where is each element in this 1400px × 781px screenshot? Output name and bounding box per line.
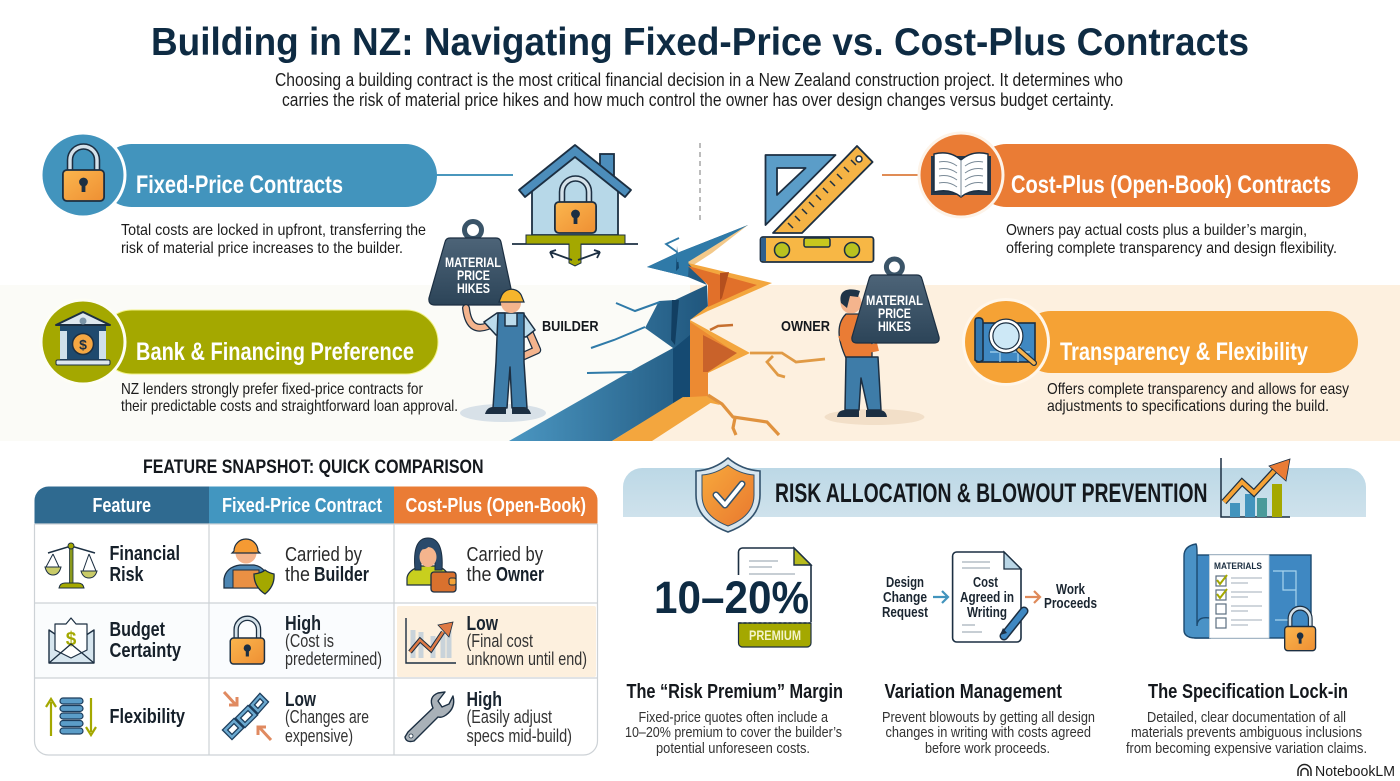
small blue fissures (666, 238, 679, 262)
icon: chain under pressure (224, 692, 271, 740)
column: variation management: before work proceeds. (925, 741, 1050, 757)
icon: shield with tick (696, 458, 760, 532)
icon: padlock (63, 146, 104, 201)
centre divider (699, 143, 701, 222)
row: budget certainty: Budget (110, 619, 165, 641)
subtitle (275, 70, 1123, 110)
flow: design change to work proceeds: Design (886, 575, 924, 591)
icon: open book (931, 153, 991, 197)
icon: padlock (230, 618, 264, 664)
label: builder: BUILDER (542, 318, 599, 335)
column: variation management: changes in writing with costs agreed (886, 725, 1091, 741)
panel: bank and financing preference: their predictable costs and straightforward loan approval. (121, 398, 458, 415)
heading: feature snapshot: FEATURE SNAPSHOT: QUICK COMPARISON (143, 456, 484, 478)
icon: envelope with dollar: $ (66, 629, 77, 650)
row: flexibility (46, 689, 572, 746)
icon: spring with arrows (46, 698, 96, 736)
column: specification lock-in: The Specification Lock-in (1148, 680, 1348, 703)
flow: design change to work proceeds: Work (1056, 582, 1086, 598)
panel: fixed-price contracts (40, 132, 513, 257)
subtitle: carries the risk of material price hikes and how much control the owner has over design changes versus budget certainty. (282, 90, 1114, 110)
column: variation management: Prevent blowouts by getting all design (882, 710, 1095, 726)
panel: cost-plus contracts: Cost-Plus (Open-Book) Contracts (1011, 171, 1331, 199)
panel: transparency and flexibility: Offers complete transparency and allows for easy (1047, 381, 1349, 398)
flow: design change to work proceeds: Proceeds (1044, 596, 1097, 612)
flow: design change to work proceeds: Change (883, 590, 927, 606)
small orange fissures (710, 325, 733, 330)
panel: cost-plus contracts: Owners pay actual costs plus a builder’s margin, (1006, 222, 1307, 239)
row: budget certainty: predetermined) (285, 649, 382, 669)
row: financial risk: Builder (314, 564, 369, 586)
panel: bank and financing preference: NZ lenders strongly prefer fixed-price contracts for (121, 381, 424, 398)
weight: material price hikes, builder (429, 222, 513, 305)
logo: NotebookLM: NotebookLM (1315, 763, 1395, 780)
column: risk premium margin: 10–20% premium to cover the builder’s (625, 725, 842, 741)
panel: bank and financing preference (40, 298, 458, 415)
row: flexibility: Low (285, 689, 316, 711)
orange lip along bottom (612, 397, 712, 441)
background band: builder side (0, 285, 700, 441)
row: budget certainty: (Final cost (466, 631, 533, 651)
row: flexibility: (Changes are (285, 707, 369, 727)
table header (92, 495, 586, 517)
panel: transparency and flexibility (962, 298, 1358, 415)
row: financial risk: Financial (110, 543, 180, 565)
weight: material price hikes, owner: HIKES (878, 318, 911, 334)
row: budget certainty: High (285, 613, 321, 635)
row: flexibility: specs mid-build) (466, 726, 572, 746)
flow: design change to work proceeds: Writing (967, 605, 1007, 621)
panel: transparency and flexibility: adjustments to specifications during the build. (1047, 398, 1329, 415)
row: budget certainty: unknown until end) (466, 649, 587, 669)
title: Building in NZ: Navigating Fixed-Price vs. Cost-Plus Contracts (151, 21, 1249, 64)
row: flexibility: High (466, 689, 502, 711)
background band: owner side (690, 285, 1400, 441)
flow: design change to work proceeds (882, 552, 1097, 642)
figure: owner (824, 289, 924, 425)
row: flexibility: Flexibility (110, 706, 186, 728)
row: financial risk: the (466, 564, 492, 586)
row: budget certainty (49, 613, 587, 669)
icon: house with padlock (512, 145, 638, 266)
weight: material price hikes, owner: MATERIAL (866, 292, 923, 308)
big number: 10–20% (654, 572, 809, 623)
row: budget certainty: (Cost is (285, 631, 334, 651)
icon: materials blueprint: MATERIALS (1214, 561, 1262, 572)
icon: premium document: PREMIUM (749, 627, 801, 643)
row: financial risk: Carried by (466, 544, 543, 566)
row: flexibility: (Easily adjust (466, 707, 552, 727)
blue wall (509, 225, 748, 441)
panel: cost-plus contracts: offering complete transparency and design flexibility. (1006, 240, 1337, 257)
panel: fixed-price contracts: Fixed-Price Contracts (136, 171, 343, 199)
flow: design change to work proceeds: Request (882, 605, 928, 621)
column: risk premium margin: Fixed-price quotes often include a (638, 710, 829, 726)
weight: material price hikes, builder: HIKES (457, 280, 490, 296)
weight: material price hikes, owner (852, 259, 939, 343)
icon: envelope with dollar (49, 618, 94, 663)
column: specification lock-in (1126, 544, 1367, 757)
column: variation management: Variation Management (884, 680, 1062, 703)
column: risk premium margin: potential unforeseen costs. (656, 741, 810, 757)
icon: materials blueprint (1184, 544, 1316, 651)
row: financial risk: the (285, 564, 310, 586)
icon: rising cost chart (406, 618, 456, 663)
icon: set square, ruler and spirit level (760, 146, 874, 262)
icon: premium document (738, 548, 811, 647)
weight: material price hikes, builder: PRICE (457, 267, 490, 283)
column: risk premium margin: The “Risk Premium” Margin (626, 680, 843, 703)
upper orange wall (688, 263, 772, 320)
icon: bank (56, 312, 110, 365)
icon: wrench (405, 692, 454, 742)
row: budget certainty: Certainty (110, 640, 182, 662)
column: specification lock-in: Detailed, clear documentation of all (1147, 710, 1346, 726)
column: specification lock-in: materials prevents ambiguous inclusions (1131, 725, 1362, 741)
table header: Fixed-Price Contract (222, 495, 382, 517)
lower orange wall (683, 320, 750, 405)
table header: Feature (92, 495, 151, 517)
icon: rising growth chart (1221, 458, 1290, 517)
row: financial risk (45, 538, 544, 594)
column: variation management (882, 552, 1097, 757)
row: financial risk: Carried by (285, 544, 362, 566)
icon: scales (45, 543, 97, 588)
banner: risk allocation and blowout prevention: RISK ALLOCATION & BLOWOUT PREVENTION (775, 478, 1208, 508)
icon: bank: $ (79, 336, 87, 352)
comparison table (34, 486, 598, 755)
row: financial risk: Risk (110, 564, 144, 586)
row: financial risk: Owner (496, 564, 544, 586)
panel: fixed-price contracts: Total costs are locked in upfront, transferring the (121, 222, 426, 239)
figure: builder (460, 289, 546, 422)
subtitle: Choosing a building contract is the most critical financial decision in a New Zealand construction project. It determines who (275, 70, 1123, 90)
table header: Cost-Plus (Open-Book) (406, 495, 586, 517)
flow: design change to work proceeds: Cost (973, 575, 998, 591)
panel: transparency and flexibility: Transparency & Flexibility (1060, 338, 1308, 366)
icon: owner with wallet (407, 538, 456, 592)
banner: risk allocation and blowout prevention (623, 458, 1366, 532)
row: budget certainty: Low (466, 613, 498, 635)
panel: bank and financing preference: Bank & Financing Preference (136, 338, 414, 366)
label: owner: OWNER (781, 318, 830, 335)
icon: blueprint with magnifier (975, 318, 1035, 363)
panel: cost-plus contracts (882, 132, 1358, 257)
weight: material price hikes, owner: PRICE (878, 305, 911, 321)
column: specification lock-in: from becoming expensive variation claims. (1126, 741, 1367, 757)
illustration: ground crack (509, 225, 825, 441)
column: risk premium margin (625, 548, 843, 757)
row: flexibility: expensive) (285, 726, 353, 746)
panel: fixed-price contracts: risk of material price increases to the builder. (121, 240, 403, 257)
flow: design change to work proceeds: Agreed in (960, 590, 1014, 606)
weight: material price hikes, builder: MATERIAL (445, 254, 501, 270)
icon: builder with shield (224, 539, 274, 594)
